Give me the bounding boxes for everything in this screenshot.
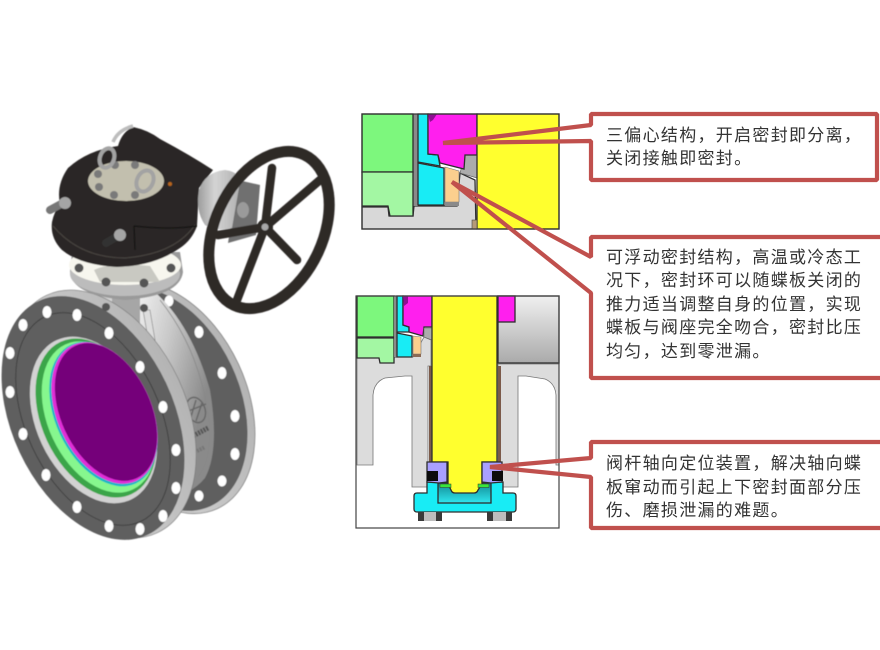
bolts [418,512,512,521]
magenta disc section [403,296,432,336]
callout: stem axial locating device [490,442,880,528]
bottom cap [414,482,516,512]
callout text: 阀杆轴向定位装置，解决轴向蝶 [606,454,862,473]
purple corner [403,296,408,306]
front flange [0,260,233,569]
lavender locating rings [427,462,502,483]
grey shim [424,328,432,340]
purple disc [34,327,178,497]
butterfly valve illustration [0,126,353,569]
gearbox [50,126,213,267]
right disc section [498,296,559,363]
black packing [427,471,503,481]
green seat [357,296,394,337]
callout text [606,454,862,520]
neck [112,296,155,340]
callout text: 况下，密封环可以随蝶板关闭的 [606,271,862,290]
green thrust pads [440,484,489,488]
grey housing [362,173,476,229]
cyan lower ring [397,333,412,357]
orange sealing ring [413,336,421,354]
side bolts [50,197,126,243]
cyan lower ring [418,163,444,205]
eye bolts [97,146,157,194]
rear flange [40,254,290,542]
dark strip [394,296,397,357]
bolt holes [6,306,180,535]
callout text: 均匀，达到零泄漏。 [606,342,771,361]
light green retainer [357,338,394,363]
callout text: 板窜动而引起上下密封面部分压 [606,478,862,497]
ring base [445,202,459,206]
yellow shaft [477,114,559,229]
green seat [362,114,413,172]
flange face [0,267,221,569]
callout text: 蝶板与阀座完全吻合，密封比压 [606,318,862,337]
right housing [498,364,559,487]
cyan upper ring [418,114,440,166]
left housing [357,337,431,487]
yellow shaft [432,296,497,493]
callout text: 推力适当调整自身的位置，实现 [606,295,862,314]
frame outline [356,296,559,528]
callout text [606,248,862,361]
valve body [60,288,214,500]
callout: floating seal [452,182,880,378]
lifting ear [113,126,133,142]
magenta disc section [428,114,477,169]
ring base [413,354,421,357]
bushings [429,366,501,462]
callout: triple offset [443,114,877,180]
handwheel drum [198,170,260,243]
grey shim [460,155,477,178]
orange sealing ring [445,167,459,202]
callout text: 三偏心结构，开启密封即分离， [606,126,862,145]
bore [5,316,182,524]
dark strip [413,114,418,206]
lower mounting flange [69,245,183,312]
detail diagram: shaft cross-section [356,296,559,528]
callout text: 伤、磨损泄漏的难题。 [606,501,789,520]
callout text [606,126,862,168]
purple corner [428,114,437,122]
callout text: 可浮动密封结构，高温或冷态工 [606,248,862,267]
frame outline [362,114,559,229]
light green retainer [362,172,413,216]
handwheel [185,132,353,328]
callout text: 关闭接触即密封。 [606,149,752,168]
detail diagram: seal cross-section [362,114,559,229]
tan bushing [472,220,477,229]
right magenta block [498,296,515,322]
logo on body [183,395,209,451]
cap recess [438,483,491,503]
cyan upper ring [397,296,409,332]
top plate [88,161,164,201]
